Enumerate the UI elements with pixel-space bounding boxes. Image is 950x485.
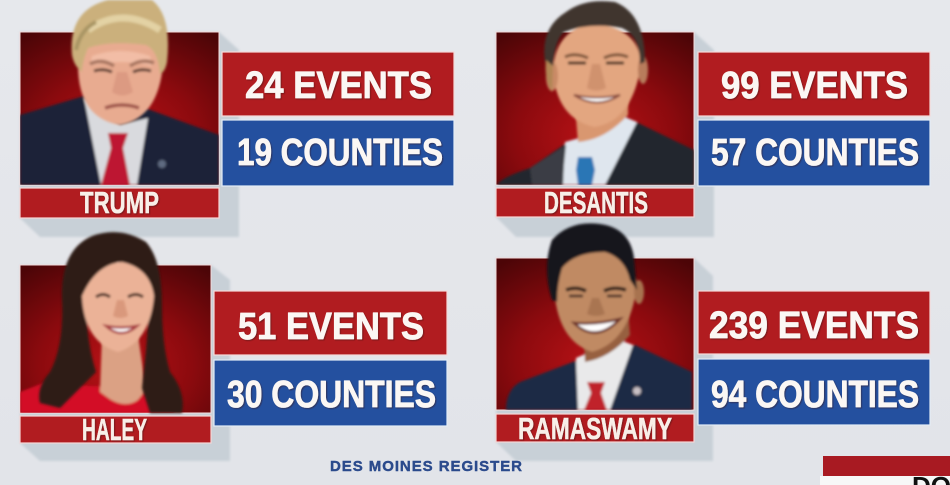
portrait: Trump bbox=[20, 0, 219, 185]
card shadow: Ramaswamy bbox=[496, 258, 713, 461]
stat: events: 239 EVENTS bbox=[709, 305, 919, 347]
stat: counties bbox=[214, 360, 447, 426]
name label: RAMASWAMY: RAMASWAMY bbox=[518, 411, 672, 446]
stat: counties bbox=[698, 359, 930, 425]
stat: counties bbox=[698, 120, 930, 186]
name label: TRUMP bbox=[20, 185, 219, 220]
panel: Haley bbox=[20, 232, 447, 461]
name label: HALEY: HALEY bbox=[82, 412, 147, 447]
stat: events: 99 EVENTS bbox=[721, 65, 908, 107]
stat: counties bbox=[222, 120, 454, 186]
stat: events bbox=[698, 52, 930, 116]
stat: counties: 30 COUNTIES bbox=[227, 374, 436, 416]
stat: events bbox=[698, 291, 930, 354]
stat: events: 24 EVENTS bbox=[245, 65, 432, 107]
card shadow: Trump bbox=[20, 32, 239, 237]
stat: events: 51 EVENTS bbox=[238, 306, 424, 348]
panel: DeSantis bbox=[496, 1, 930, 237]
card shadow: DeSantis bbox=[496, 32, 714, 237]
stat: events bbox=[222, 52, 454, 116]
portrait: DeSantis bbox=[496, 1, 694, 185]
panel: Ramaswamy bbox=[496, 223, 930, 461]
source credit: DES MOINES REGISTER bbox=[330, 458, 522, 475]
panel: Trump bbox=[20, 0, 454, 237]
stat: events bbox=[214, 291, 447, 355]
portrait: Haley bbox=[20, 232, 211, 413]
name label: TRUMP: TRUMP bbox=[80, 185, 159, 220]
name label: HALEY bbox=[20, 412, 211, 447]
name label: DESANTIS: DESANTIS bbox=[544, 185, 648, 220]
stat: counties: 19 COUNTIES bbox=[237, 132, 443, 174]
lower-right broadcast banner bbox=[820, 456, 950, 485]
card shadow: Haley bbox=[20, 265, 230, 461]
portrait: Ramaswamy bbox=[496, 223, 694, 410]
